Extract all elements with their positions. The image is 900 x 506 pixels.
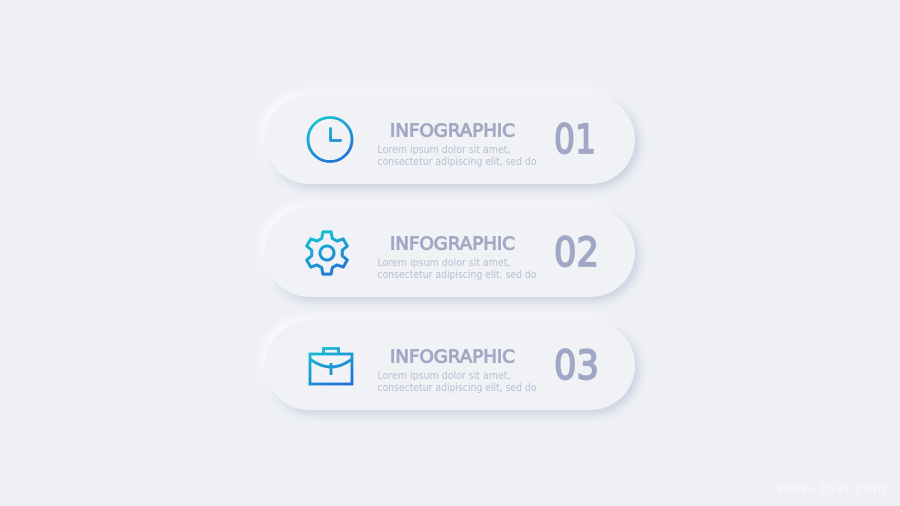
number 01: 01 [554,117,596,163]
panel: item 02 [265,208,635,297]
panel: item 03 [265,321,635,410]
number 02: 02 [554,230,599,276]
heading: item 02: INFOGRAPHIC [390,234,515,254]
text block: item 01 [378,144,536,168]
text block: item 02 [378,257,536,281]
text block: item 01: Lorem ipsum dolor sit amet, [378,144,510,156]
icon: clock [308,118,352,162]
panel: item 01 [265,95,635,184]
icon: briefcase [310,348,352,384]
text block: item 03 [378,370,536,394]
icon: gear [307,232,347,274]
heading: item 03: INFOGRAPHIC [390,346,515,368]
text block: item 02: Lorem ipsum dolor sit amet, [378,257,510,269]
heading: item 01: INFOGRAPHIC [390,120,515,142]
text block: item 02: consectetur adipiscing elit, sed do [378,269,536,281]
text block: item 01: consectetur adipiscing elit, sed do [378,156,536,168]
text block: item 03: consectetur adipiscing elit, sed do [378,382,536,394]
watermark: www.25xt.com [778,480,887,496]
number 03: 03 [554,343,599,389]
text block: item 03: Lorem ipsum dolor sit amet, [378,370,510,382]
